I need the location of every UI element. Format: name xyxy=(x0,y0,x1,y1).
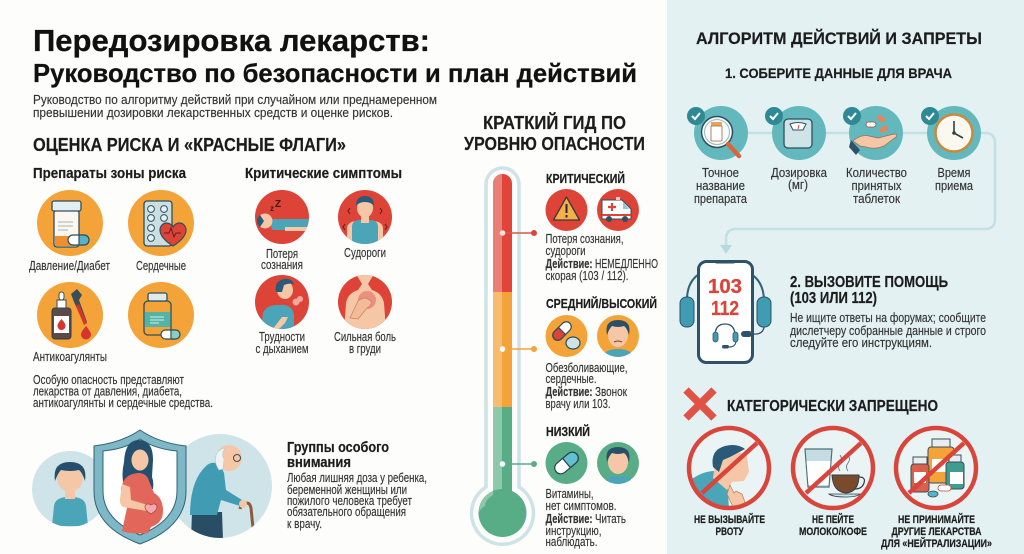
label: Сердечные xyxy=(136,258,186,273)
special groups text: беременной женщины или xyxy=(287,482,407,497)
heading: danger level guide xyxy=(464,112,645,154)
step 2 text xyxy=(790,274,986,350)
level text: нет симптомов. xyxy=(546,498,616,513)
level text: сердечные. xyxy=(546,371,596,386)
icon: scale xyxy=(765,106,826,160)
panel: algorithm background xyxy=(667,0,1024,554)
label xyxy=(881,513,992,550)
label: Судороги xyxy=(344,245,386,260)
label xyxy=(694,165,748,206)
forbidden: milk and coffee xyxy=(793,428,873,538)
step 2 text: 2. ВЫЗОВИТЕ ПОМОЩЬ xyxy=(790,274,948,291)
heading: algorithm: АЛГОРИТМ ДЕЙСТВИЙ И ЗАПРЕТЫ xyxy=(696,29,982,48)
icon: seizures xyxy=(338,190,392,245)
level text: Действие: xyxy=(546,511,592,526)
icon: no other medicines xyxy=(896,428,976,508)
icon: phone with headset: 103 xyxy=(708,276,742,298)
label xyxy=(799,513,867,538)
label: Точное xyxy=(702,165,739,180)
chart: thermometer xyxy=(472,168,537,544)
icon: anticoagulant dropper xyxy=(37,282,103,348)
label: название xyxy=(696,178,745,193)
check badge xyxy=(921,107,939,125)
arrow: connector to step 2 xyxy=(720,133,995,254)
label xyxy=(846,165,907,206)
level text: врачу или 103. xyxy=(546,396,610,411)
forbidden: other drugs xyxy=(881,428,992,550)
level text xyxy=(546,231,658,283)
level text: инструкцию, xyxy=(546,523,602,538)
icon: calm person xyxy=(597,442,639,485)
icon: loss of consciousness xyxy=(255,190,315,244)
intro text: превышении дозировки лекарственных средств и оценке рисков. xyxy=(33,105,393,120)
icon: no milk or coffee xyxy=(793,428,873,508)
icon: hand with pills xyxy=(843,106,903,160)
icon: pill bottle xyxy=(37,190,103,256)
label xyxy=(771,165,828,192)
label xyxy=(935,165,974,193)
heading: forbidden: КАТЕГОРИЧЕСКИ ЗАПРЕЩЕНО xyxy=(727,398,938,415)
illustration: special groups xyxy=(32,430,272,544)
heading: step 1: 1. СОБЕРИТЕ ДАННЫЕ ДЛЯ ВРАЧА xyxy=(725,65,952,81)
risk drugs note: антикоагулянты и сердечные средства. xyxy=(33,395,213,410)
label: РВОТУ xyxy=(716,526,744,538)
risk drugs note xyxy=(33,372,213,410)
heading: danger level guide: КРАТКИЙ ГИД ПО xyxy=(483,112,626,133)
special groups text: пожилого человека требует xyxy=(287,493,412,508)
special groups text: к врачу. xyxy=(287,516,322,531)
level: critical xyxy=(546,171,658,283)
icon: warning xyxy=(546,189,588,231)
heading: critical symptoms: Критические симптомы xyxy=(245,166,402,182)
label: МОЛОКО/КОФЕ xyxy=(799,526,867,538)
check badge xyxy=(843,107,861,125)
level text: Обезболивающие, xyxy=(546,360,628,375)
forbidden: vomiting xyxy=(688,428,769,538)
label: (мг) xyxy=(788,177,808,192)
label: Дозировка xyxy=(771,165,828,180)
label: ДРУГИЕ ЛЕКАРСТВА xyxy=(892,526,982,538)
level text: Действие: xyxy=(546,384,592,399)
label xyxy=(694,513,765,538)
level: low xyxy=(546,424,639,549)
step 1 items xyxy=(687,106,981,206)
title xyxy=(33,23,637,88)
heading: danger level guide: УРОВНЮ ОПАСНОСТИ xyxy=(464,134,645,154)
level text xyxy=(546,360,628,411)
icon: loss of consciousness: Z xyxy=(275,199,281,210)
heading: risk assessment: ОЦЕНКА РИСКА И «КРАСНЫЕ ФЛАГИ» xyxy=(33,135,346,155)
special groups text: Группы особого xyxy=(287,440,389,456)
panel: critical symptoms xyxy=(245,166,402,356)
level text: Витамины, xyxy=(546,486,594,501)
icon: worried person xyxy=(597,315,639,358)
icon: drug name xyxy=(687,106,748,160)
level heading: СРЕДНИЙ/ВЫСОКИЙ xyxy=(546,296,657,311)
check badge xyxy=(687,107,705,125)
panel: risk drugs xyxy=(29,166,213,410)
label: приема xyxy=(935,178,974,193)
level text xyxy=(546,486,626,549)
level: medium/high xyxy=(546,296,657,411)
label: Давление/Диабет xyxy=(29,258,110,273)
label: НЕ ВЫЗЫВАЙТЕ xyxy=(694,513,765,526)
intro text: Руководство по алгоритму действий при случайном или преднамеренном xyxy=(33,92,437,107)
label: Количество xyxy=(846,165,907,180)
level heading: КРИТИЧЕСКИЙ xyxy=(546,171,625,186)
label: Время xyxy=(938,165,970,180)
icon: red cross xyxy=(686,390,714,418)
label: таблеток xyxy=(853,191,900,206)
level text: судороги xyxy=(546,243,586,258)
risk drugs note: лекарства от давления, диабета, xyxy=(33,384,182,398)
icon: phone with headset: 112 xyxy=(711,298,739,320)
icon: no vomiting xyxy=(688,428,769,511)
elderly man xyxy=(178,434,272,538)
title: Передозировка лекарств: xyxy=(33,23,430,58)
check badge xyxy=(765,107,783,125)
special groups text xyxy=(287,440,427,531)
heading: risk drugs: Препараты зоны риска xyxy=(33,166,187,182)
label: в груди xyxy=(349,341,381,356)
icon: chest pain xyxy=(338,274,392,330)
icon: pills xyxy=(546,315,588,357)
step 2 text: следуйте его инструкциям. xyxy=(790,335,932,350)
label: Сильная боль xyxy=(334,329,396,344)
label: Антикоагулянты xyxy=(33,349,107,364)
label: Трудности xyxy=(259,329,305,344)
label: с дыханием xyxy=(256,341,309,356)
icon: loss of consciousness: z xyxy=(270,204,274,213)
label: препарата xyxy=(694,191,748,206)
icon: clock xyxy=(921,106,981,160)
title: Руководство по безопасности и план действий xyxy=(33,58,637,88)
level text: Звонок xyxy=(595,384,627,399)
label xyxy=(256,329,309,356)
label: сознания xyxy=(261,257,303,272)
step 2 text: (103 ИЛИ 112) xyxy=(790,290,877,307)
level text: НЕМЕДЛЕННО xyxy=(595,256,658,271)
level text: наблюдать. xyxy=(546,534,598,549)
level text: Читать xyxy=(595,511,626,526)
special groups text: Любая лишняя доза у ребенка, xyxy=(287,470,427,485)
label: ДЛЯ «НЕЙТРАЛИЗАЦИИ» xyxy=(881,537,992,550)
label: принятых xyxy=(852,178,902,193)
special groups text: обязательного обращения xyxy=(287,504,406,519)
icon: blister and heart xyxy=(128,190,194,256)
label: Потеря xyxy=(266,246,298,261)
icon: jar and capsule xyxy=(128,282,194,348)
intro text xyxy=(33,92,437,120)
special groups text: внимания xyxy=(287,455,351,471)
child xyxy=(32,451,99,527)
level heading: НИЗКИЙ xyxy=(546,424,590,439)
label xyxy=(261,246,303,272)
level text: Потеря сознания, xyxy=(546,231,624,246)
label xyxy=(334,329,396,356)
level text: Действие: xyxy=(546,256,592,271)
label: НЕ ПЕЙТЕ xyxy=(812,513,854,526)
icon: phone with headset xyxy=(680,260,771,362)
shield and pregnant woman xyxy=(94,430,186,544)
label: НЕ ПРИНИМАЙТЕ xyxy=(898,513,975,526)
icon: ambulance xyxy=(597,189,639,231)
icon: capsule xyxy=(546,442,588,484)
icon: breathing difficulty xyxy=(255,275,309,330)
level text: скорая (103 / 112). xyxy=(546,268,628,283)
risk drugs note: Особую опасность представляют xyxy=(33,372,184,387)
